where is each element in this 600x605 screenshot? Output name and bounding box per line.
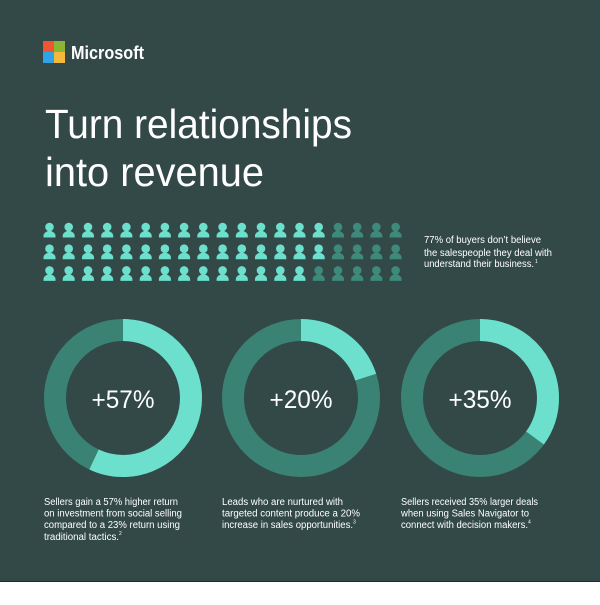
text: Sales Navigator stat: Sellers received 35% larger deals: [401, 497, 538, 508]
text: nurtured leads stat: targeted content produce a 20%: [222, 508, 360, 520]
value: +20%: [270, 386, 332, 414]
text: Sales Navigator stat: [400, 497, 538, 531]
text: social selling stat: on investment from social selling: [44, 508, 182, 520]
text: 77 percent stat: 77% of buyers don’t believe: [424, 235, 541, 246]
text: 77 percent stat: [424, 235, 552, 270]
row 1: [44, 223, 402, 238]
title: [45, 101, 352, 195]
text: Sales Navigator stat: 4: [528, 520, 531, 526]
donut chart: +35%: [412, 330, 548, 466]
donut chart: +20%: [233, 330, 369, 466]
row 2: [44, 244, 402, 259]
text: nurtured leads stat: [222, 497, 360, 531]
icon: Microsoft squares: [43, 41, 65, 63]
logo wordmark: Microsoft: [71, 42, 144, 63]
text: Sales Navigator stat: connect with decision makers.: [401, 520, 528, 531]
row 3: [44, 266, 402, 281]
text: nurtured leads stat: 3: [353, 520, 356, 526]
value: +57%: [92, 386, 154, 414]
title: into revenue: [45, 149, 264, 195]
text: 77 percent stat: the salespeople they deal with: [424, 248, 552, 259]
text: nurtured leads stat: Leads who are nurtured with: [222, 497, 343, 508]
text: social selling stat: [44, 497, 182, 543]
text: nurtured leads stat: increase in sales opportunities.: [222, 520, 353, 531]
donut chart: +57%: [55, 330, 191, 466]
text: 77 percent stat: understand their business.: [424, 259, 534, 270]
text: social selling stat: traditional tactics.: [44, 532, 119, 543]
pictogram: 77 percent of buyers: [44, 223, 402, 281]
value: +35%: [448, 386, 512, 414]
text: 77 percent stat: 1: [535, 259, 538, 265]
text: social selling stat: 2: [119, 531, 122, 537]
text: social selling stat: Sellers gain a 57% higher return: [44, 497, 178, 508]
text: Sales Navigator stat: when using Sales Navigator to: [400, 508, 529, 520]
title: Turn relationships: [45, 101, 352, 147]
text: social selling stat: compared to a 23% return using: [44, 520, 180, 531]
logo: Microsoft: [43, 41, 144, 63]
